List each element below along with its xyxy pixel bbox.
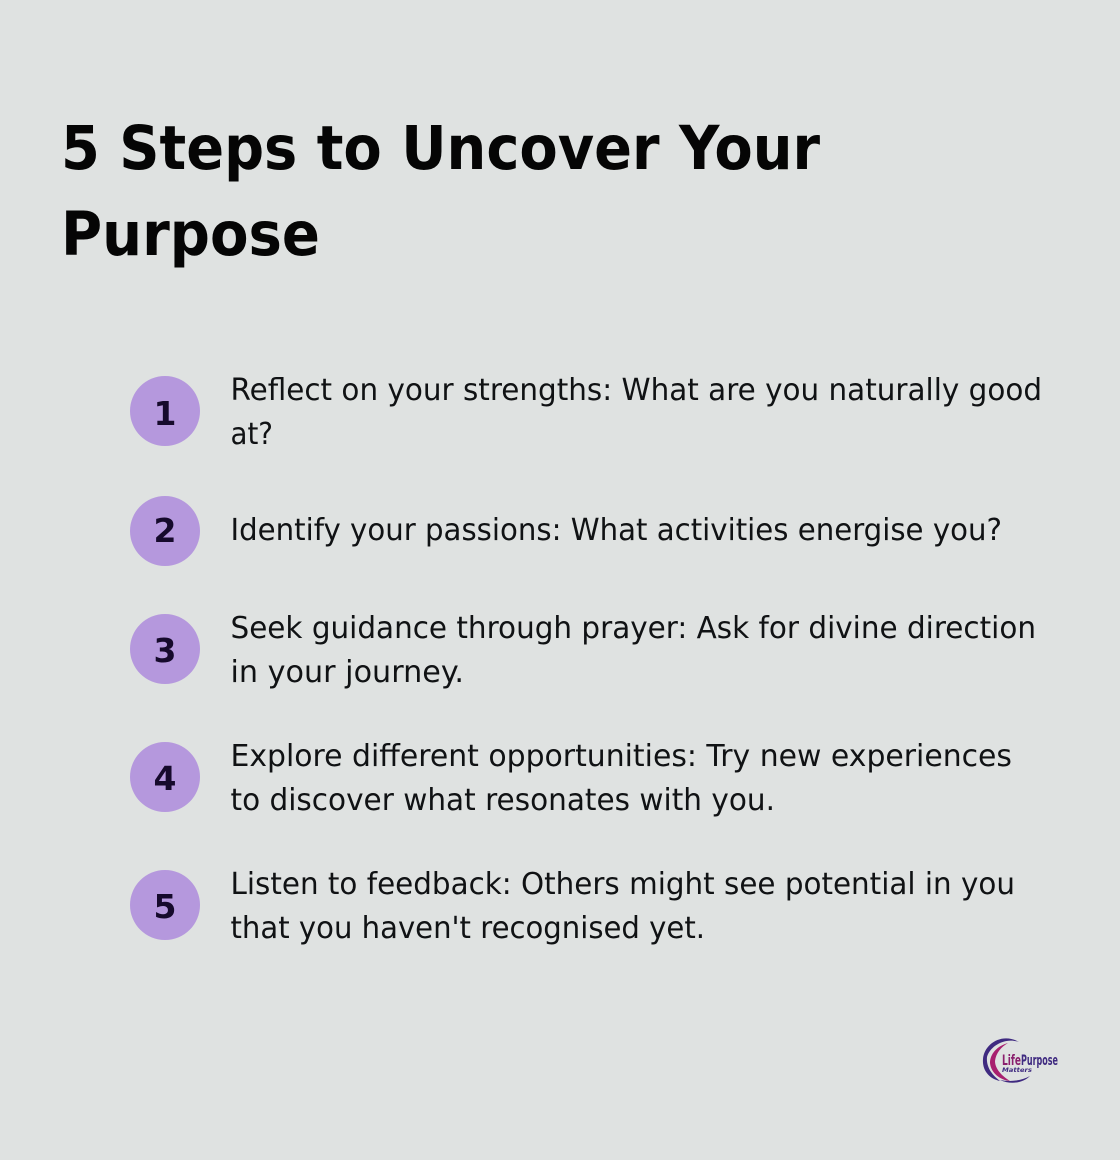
step 5 text: that you haven't recognised yet. xyxy=(230,911,705,946)
step 4 text xyxy=(230,739,1012,818)
number badge 2 xyxy=(130,496,200,566)
step 1 xyxy=(130,373,1042,452)
step 1 text: Reflect on your strengths: What are you naturally good xyxy=(230,373,1042,408)
logo: Life Purpose Matters: Purpose xyxy=(1021,1053,1058,1069)
number badge 1: 1 xyxy=(154,394,176,433)
number badge 4 xyxy=(130,742,200,812)
number badge 3 xyxy=(130,614,200,684)
step 5 text: Listen to feedback: Others might see potential in you xyxy=(230,867,1015,902)
number badge 2: 2 xyxy=(154,511,176,550)
logo: Life Purpose Matters: Matters xyxy=(1002,1066,1032,1074)
number badge 4: 4 xyxy=(154,759,176,798)
title: Purpose xyxy=(61,199,320,270)
step 5 text xyxy=(230,867,1015,946)
logo: Life Purpose Matters: Life xyxy=(1002,1053,1021,1069)
step 3 text: Seek guidance through prayer: Ask for divine direction xyxy=(230,611,1036,646)
step 3 text: in your journey. xyxy=(230,655,464,690)
step 3 xyxy=(130,611,1036,690)
title xyxy=(61,113,820,270)
step 4 xyxy=(130,739,1012,818)
number badge 5: 5 xyxy=(154,887,176,926)
step 2 text: Identify your passions: What activities energise you? xyxy=(230,513,1002,548)
title: 5 Steps to Uncover Your xyxy=(61,113,820,184)
step 1 text: at? xyxy=(230,417,273,452)
step 4 text: Explore different opportunities: Try new experiences xyxy=(230,739,1012,774)
logo: Life Purpose Matters xyxy=(983,1038,1058,1083)
step 1 text xyxy=(230,373,1042,452)
step 4 text: to discover what resonates with you. xyxy=(230,783,775,818)
step 5 xyxy=(130,867,1015,946)
step 2 xyxy=(130,496,1002,566)
number badge 5 xyxy=(130,870,200,940)
number badge 3: 3 xyxy=(154,631,176,670)
step 3 text xyxy=(230,611,1036,690)
number badge 1 xyxy=(130,376,200,446)
